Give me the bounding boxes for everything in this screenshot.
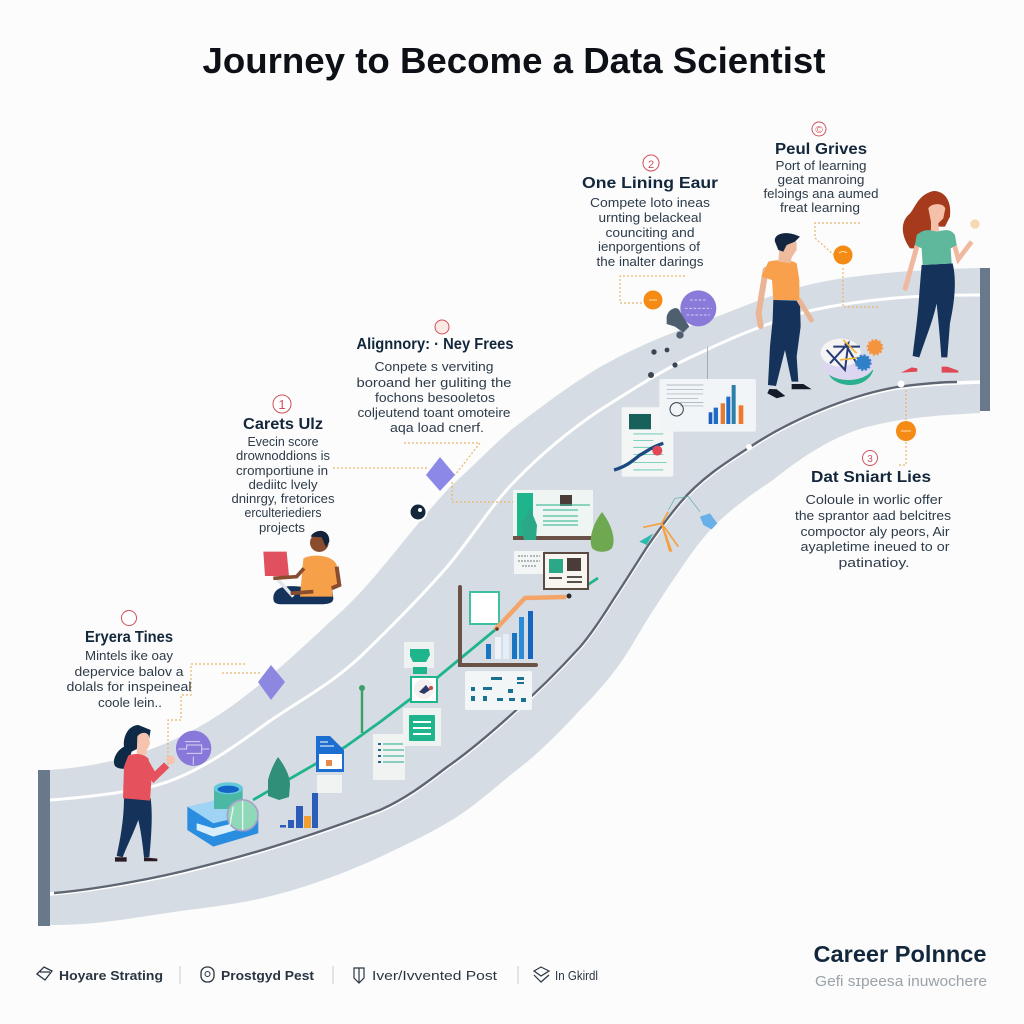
step 5: text block — [764, 122, 878, 215]
woman in green top — [901, 191, 980, 373]
body: coole lein.. — [98, 695, 162, 710]
body: Mintels ike oay — [85, 648, 174, 663]
legend item 4: In Gkirdl — [555, 968, 598, 983]
heading: Alignnory: · Ney Frees — [356, 336, 514, 353]
body: felɔings ana aumed — [764, 186, 878, 201]
body — [764, 158, 878, 215]
body: ienporgentions of — [598, 239, 700, 254]
icon: purple diamond centre — [426, 457, 455, 491]
body: aqa load cnerf. — [390, 420, 484, 435]
small bar chart — [280, 793, 318, 828]
body: dolals for inspeineal — [66, 679, 192, 694]
scatter card — [465, 671, 532, 710]
number icon: 1 — [278, 397, 286, 412]
footer legend — [37, 966, 598, 984]
body: drownoddions is — [236, 448, 330, 463]
right post — [980, 268, 990, 411]
woman with red top — [114, 725, 175, 862]
body: Compete loto ineas — [590, 195, 711, 210]
heading: One Lining Eaur — [582, 175, 718, 192]
body: depervice balov a — [74, 664, 184, 679]
body: Evecin score — [248, 434, 318, 449]
legend item 4 — [534, 967, 598, 983]
step 2: text block — [232, 395, 335, 535]
icon: green list card — [403, 708, 441, 746]
number icon: © — [815, 125, 823, 136]
road marker dots — [746, 380, 904, 450]
body — [590, 195, 711, 269]
body: projects — [259, 520, 305, 535]
number icon: 2 — [648, 159, 654, 171]
man in orange shirt — [759, 233, 812, 398]
number icon — [862, 450, 878, 466]
icon: checklist card — [373, 734, 405, 780]
icon: analysis report — [614, 407, 673, 477]
legend item 2: Prostgyd Pest — [221, 968, 315, 983]
number icon — [435, 320, 449, 334]
heading: Eryera Tines — [85, 629, 173, 646]
body — [66, 648, 192, 710]
icon: orange node middle — [834, 246, 852, 264]
heading: Peul Grives — [775, 141, 867, 158]
heading: Carets Ulz — [243, 416, 323, 433]
brand name: Career Polnnce — [814, 941, 986, 967]
body — [356, 359, 512, 435]
number icon: 3 — [867, 454, 873, 465]
icon: books and database — [187, 782, 258, 847]
body: fochons besooletos — [375, 390, 496, 405]
body: cromportiune in — [236, 463, 328, 478]
legend item 3: Iver/Ivvented Post — [372, 968, 497, 983]
icon: laptop person — [263, 531, 341, 604]
body: ayapletime ineued to or — [800, 539, 950, 554]
body: coljeutend toant omoteire — [358, 405, 510, 420]
body: freat learning — [780, 200, 860, 215]
icon: orange node right — [896, 421, 916, 441]
icon: badge and round image — [404, 642, 437, 702]
left post — [38, 770, 50, 926]
icon: green tree — [268, 757, 290, 800]
body: Port of learning — [776, 158, 866, 173]
body — [232, 434, 335, 535]
card: monitor with image — [514, 551, 588, 589]
icon: dark lens — [408, 502, 428, 522]
step 1: text block — [66, 610, 192, 710]
body: erculteriediers — [244, 505, 322, 520]
step 3: text block — [356, 320, 514, 435]
icon: dots — [648, 348, 678, 378]
road — [50, 268, 980, 925]
body: counciting and — [606, 225, 694, 240]
legend item 1: Hoyare Strating — [59, 968, 163, 983]
icon: green leaf — [591, 512, 614, 552]
body: geat manroing — [778, 172, 864, 187]
icon: purple circle — [176, 731, 211, 766]
body: Coloule in worlic offer — [806, 492, 943, 507]
icon: orange branch — [639, 497, 717, 552]
icon: green stem pin — [359, 685, 365, 733]
icon: bar chart card — [659, 347, 756, 432]
icon: purple diamond left — [258, 665, 285, 700]
icon: colourful bowl with gears — [821, 339, 882, 385]
card: green report — [513, 490, 593, 540]
heading: Dat Sniart Lies — [811, 469, 931, 486]
icon: green line path — [253, 578, 598, 800]
body: dediitc lvely — [248, 477, 318, 492]
brand block — [814, 941, 987, 990]
body — [795, 492, 952, 570]
title: Journey to Become a Data Scientist — [202, 40, 826, 81]
body: the inalter darings — [596, 254, 704, 269]
body: compoctor aly peors, Air — [800, 524, 950, 539]
icon: orange node left — [644, 290, 662, 310]
icon: purple balloon with creature — [667, 290, 716, 339]
body: boroand her guliting the — [356, 375, 512, 390]
icon: blue document — [316, 736, 344, 793]
step 6: text block — [795, 450, 952, 570]
connector dotted lines — [168, 223, 906, 768]
body: Conpete s verviting — [374, 359, 494, 374]
body: dninrgy, fretorices — [232, 491, 335, 506]
body: urnting belackeal — [598, 210, 702, 225]
main bar chart — [460, 587, 572, 665]
brand tagline: Gefi sɪpeesa inuwochere — [815, 973, 987, 990]
body: the sprantor aad belcitres — [795, 508, 952, 523]
step 4: text block — [582, 155, 718, 269]
body: patinatioy. — [838, 555, 910, 570]
number icon — [122, 610, 136, 626]
